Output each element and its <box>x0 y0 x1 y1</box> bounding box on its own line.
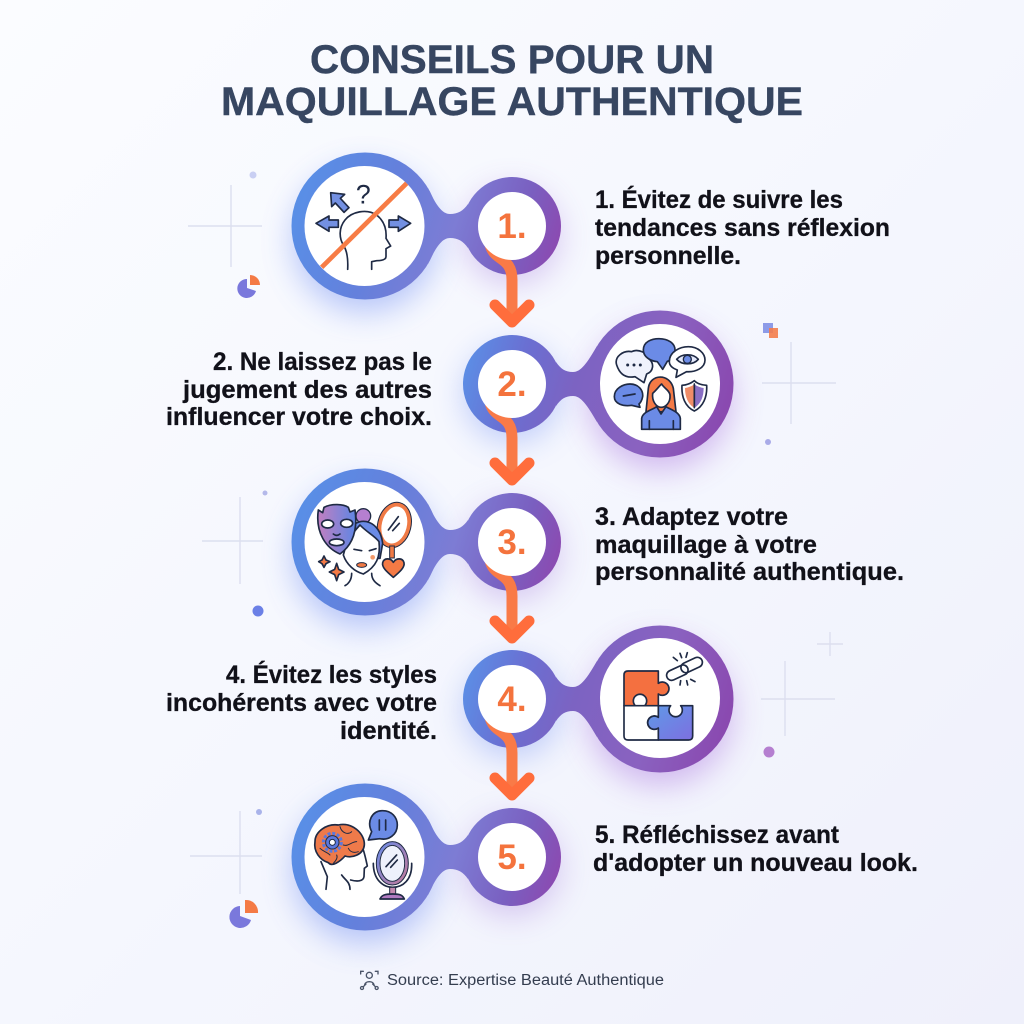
icon: head with arrows crossed out <box>304 166 424 286</box>
text: tip 4: incohérents avec votre <box>166 689 437 717</box>
number badge 1: 1. <box>497 207 527 246</box>
text: tip 1: tendances sans réflexion <box>595 214 890 242</box>
step 3 connector ring <box>292 468 561 628</box>
decorative crosses and dots <box>188 172 843 894</box>
icon: head with arrows crossed out: ? <box>356 179 371 209</box>
text: tip 1: personnelle. <box>595 242 741 270</box>
text: tip 5: d'adopter un nouveau look. <box>593 849 918 877</box>
step 1 connector ring <box>292 152 561 312</box>
number badge 2 <box>478 350 546 418</box>
arrow 3 to 4 <box>490 560 529 638</box>
title <box>221 38 803 124</box>
text: tip 1: 1. Évitez de suivre les <box>595 185 843 214</box>
number badge 1 <box>478 192 546 260</box>
text: tip 5 <box>593 821 918 877</box>
text: tip 1 <box>595 185 890 270</box>
number badge 5: 5. <box>497 838 527 877</box>
arrow 1 to 2 <box>490 244 529 322</box>
step 4 connector ring <box>463 626 734 785</box>
text: tip 4 <box>166 660 437 745</box>
text: tip 5: 5. Réfléchissez avant <box>595 821 840 849</box>
number badge 3: 3. <box>497 523 527 562</box>
arrow 2 to 3 <box>490 402 529 480</box>
step 5 connector ring <box>292 784 561 943</box>
title: CONSEILS POUR UN <box>310 38 714 82</box>
number badge 4: 4. <box>497 680 527 719</box>
number badge 2: 2. <box>497 365 527 404</box>
number badge 5 <box>478 823 546 891</box>
icon: speech bubbles, woman and shield <box>600 324 720 444</box>
icon: puzzle and broken chain <box>600 638 720 758</box>
text: tip 3 <box>595 503 904 586</box>
text: tip 4: identité. <box>340 717 437 745</box>
arrow 4 to 5 <box>490 717 529 795</box>
text: tip 2 <box>166 348 432 431</box>
text: tip 3: personnalité authentique. <box>595 558 904 586</box>
source text: Source: Expertise Beauté Authentique <box>387 972 664 989</box>
step 2 connector ring <box>463 310 734 470</box>
text: tip 2: jugement des autres <box>182 376 432 404</box>
icon: brain, speech bubble and mirror <box>304 797 424 917</box>
text: tip 3: maquillage à votre <box>595 531 817 559</box>
number badge 4 <box>478 665 546 733</box>
text: tip 2: 2. Ne laissez pas le <box>213 348 432 376</box>
number badge 3 <box>478 508 546 576</box>
text: tip 4: 4. Évitez les styles <box>226 660 437 689</box>
source icon <box>360 971 378 989</box>
icon: small pie chart bottom left <box>229 900 258 928</box>
text: tip 3: 3. Adaptez votre <box>595 503 788 531</box>
text: tip 2: influencer votre choix. <box>166 403 432 431</box>
icon: mask, face and mirror <box>304 482 424 602</box>
icon: small pie chart top left <box>237 275 260 298</box>
title: MAQUILLAGE AUTHENTIQUE <box>221 80 803 124</box>
